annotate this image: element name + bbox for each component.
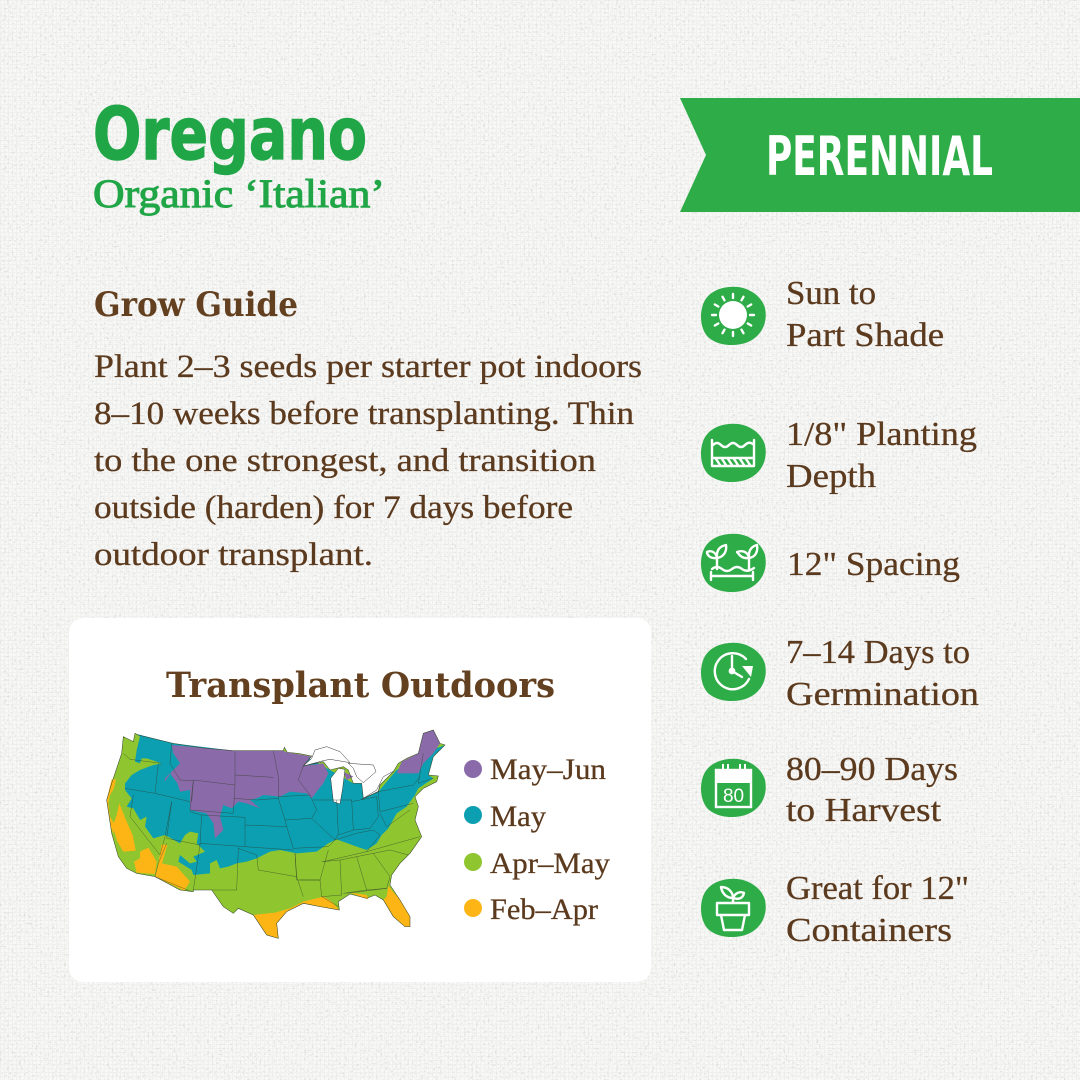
legend: May: May (490, 800, 546, 833)
subtitle: Organic Italian: Organic ‘Italian’ (93, 171, 385, 216)
text block: grow guide instructions: to the one strongest, and transition (94, 443, 596, 479)
icon: harvest calendar: 80 (723, 786, 744, 807)
text: sun to part shade: Sun to (786, 275, 876, 312)
state lines (123, 743, 433, 907)
text block: grow guide instructions: outside (harden) for 7 days before (94, 490, 573, 526)
heading: Grow Guide: Grow Guide (94, 285, 298, 325)
icon: germination clock (701, 643, 766, 701)
text: sun to part shade (786, 275, 944, 354)
text block: grow guide instructions (94, 349, 642, 573)
text: planting depth: 1/8" Planting (786, 416, 977, 453)
legend: Feb–Apr: Feb–Apr (490, 893, 598, 926)
text block: grow guide instructions: 8–10 weeks before transplanting. Thin (94, 396, 634, 432)
text: planting depth (786, 416, 977, 495)
text: days to germination: Germination (786, 676, 979, 713)
text: days to germination: 7–14 Days to (786, 634, 970, 671)
text: days to germination (786, 634, 979, 713)
text: spacing: 12" Spacing (787, 546, 960, 583)
icon: spacing (701, 534, 766, 592)
icon: harvest calendar (701, 759, 766, 817)
text: days to harvest: 80–90 Days (786, 751, 958, 788)
text: great for containers: Great for 12" (786, 870, 969, 907)
legend: May (464, 800, 546, 833)
text: great for containers: Containers (786, 912, 952, 949)
title: Oregano: Oregano (93, 92, 367, 176)
text block: grow guide instructions: outdoor transplant. (94, 537, 373, 573)
text: sun to part shade: Part Shade (786, 317, 944, 354)
banner: Perennial (680, 98, 1080, 212)
legend: Apr–May: Apr–May (490, 847, 610, 880)
legend: May–Jun: May–Jun (490, 753, 606, 786)
text: planting depth: Depth (786, 458, 876, 495)
text: great for containers (786, 870, 969, 949)
icon: planting depth (701, 424, 766, 482)
text: days to harvest: to Harvest (786, 792, 942, 829)
icon: sun (701, 287, 766, 345)
text: days to harvest (786, 751, 958, 829)
map: planting zones of the USA (106, 730, 446, 939)
heading: Transplant Outdoors: Transplant Outdoors (166, 665, 555, 706)
icon: container plant (701, 879, 766, 937)
panel: transplant outdoors (69, 618, 651, 982)
text block: grow guide instructions: Plant 2–3 seeds per starter pot indoors (94, 349, 642, 385)
